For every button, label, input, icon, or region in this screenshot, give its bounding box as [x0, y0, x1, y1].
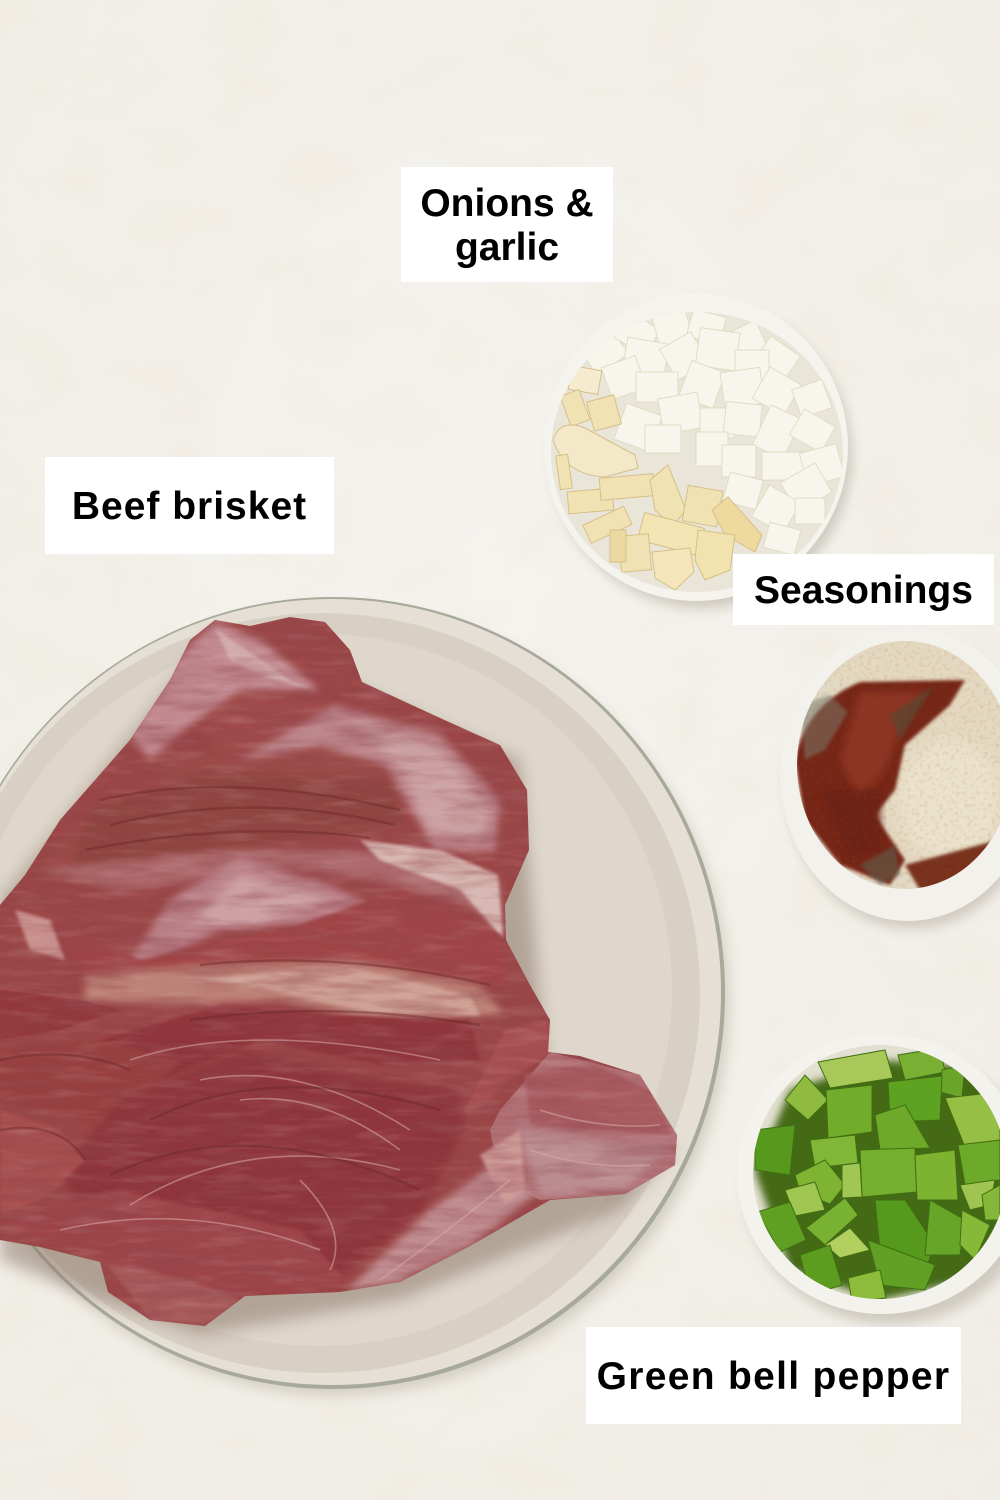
- label: beef brisket: [45, 457, 334, 554]
- bowl: seasonings: [780, 627, 1000, 929]
- middle lean: [128, 902, 502, 968]
- lower lean: [104, 1004, 480, 1077]
- bowl: onions and garlic: [544, 293, 852, 608]
- sliced garlic: [553, 366, 762, 590]
- meat edge: [465, 1020, 550, 1115]
- label: onions and garlic: [401, 167, 613, 282]
- streaks: [60, 1040, 660, 1280]
- label: onions and garlic: garlic: [455, 226, 559, 269]
- plate: [0, 597, 728, 1394]
- upper lean: [40, 710, 400, 880]
- right flap: [490, 1052, 677, 1200]
- dried herbs: [800, 695, 848, 760]
- label: seasonings: [733, 554, 994, 625]
- beef brisket: [0, 610, 690, 1335]
- label: green bell pepper: [586, 1327, 961, 1424]
- garlic powder: [826, 641, 1000, 839]
- fat patches: [130, 622, 320, 760]
- diced pepper: [755, 1048, 1000, 1302]
- diced onion: [580, 307, 845, 555]
- label: seasonings: Seasonings: [754, 569, 973, 612]
- label: beef brisket: Beef brisket: [72, 485, 307, 528]
- paprika and chilli: [795, 680, 965, 885]
- label: green bell pepper: Green bell pepper: [597, 1355, 950, 1398]
- bowl: green bell pepper: [737, 1034, 1000, 1324]
- label: onions and garlic: Onions &: [420, 182, 594, 225]
